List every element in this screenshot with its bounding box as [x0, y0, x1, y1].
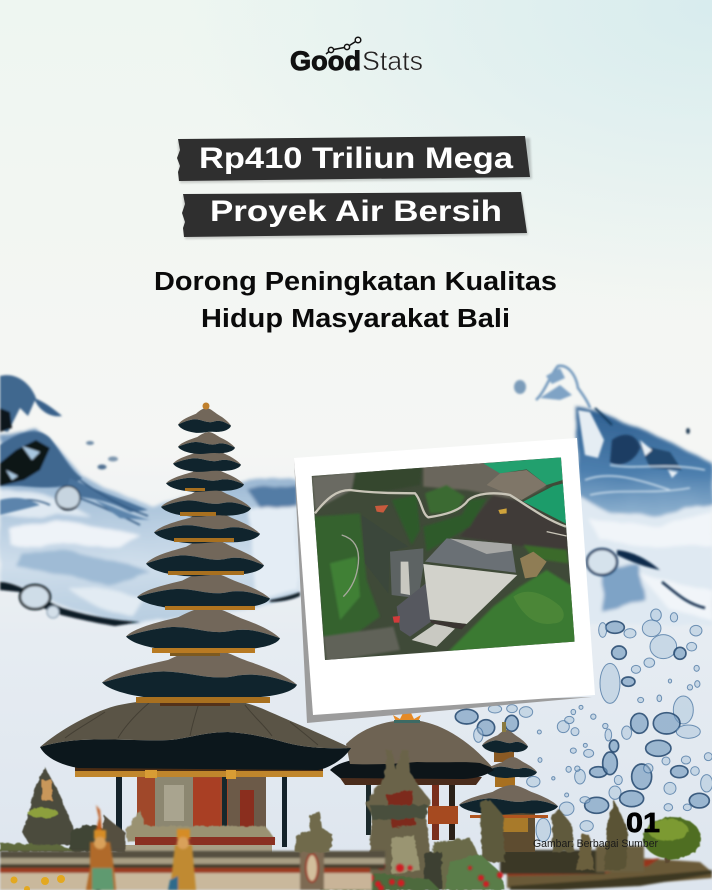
left water splash: [0, 375, 300, 626]
title tape: line 2: Proyek Air Bersih: [210, 195, 502, 228]
statue: left dancer: [86, 805, 116, 890]
subtitle: [154, 268, 557, 333]
GoodStats logo: Stats: [362, 46, 423, 76]
right water splash: [514, 366, 712, 625]
red flowers: [347, 862, 503, 890]
aerial dam photo: [307, 453, 580, 667]
main thatched roof: [40, 698, 351, 770]
logo chart line icon: [326, 37, 361, 54]
stone gate: [366, 750, 490, 890]
title tape: line 1: Rp410 Triliun Mega: [199, 142, 513, 175]
main eave: [75, 766, 323, 779]
subtitle: Hidup Masyarakat Bali: [201, 305, 510, 333]
middle roof supports: [366, 780, 458, 840]
water bubbles: [455, 609, 712, 842]
tree: [643, 817, 701, 863]
left shrine: [0, 767, 125, 852]
pagoda tiers: [102, 402, 297, 706]
frame shadow: [294, 458, 592, 723]
gate medallion: [300, 848, 324, 890]
page number: 01: [626, 807, 660, 838]
middle temple group: [320, 705, 505, 890]
GoodStats logo: Good: [290, 46, 361, 76]
green foliage: [320, 854, 505, 890]
subtitle: Dorong Peningkatan Kualitas: [154, 268, 557, 296]
image source caption: Gambar: Berbagai Sumber: [533, 838, 658, 850]
temple wall: [0, 848, 385, 890]
middle thatched roof: [330, 720, 494, 785]
stone terrace and steps: [500, 846, 712, 890]
main temple: [40, 402, 351, 855]
orange crown: [393, 705, 421, 723]
small pagoda: [459, 722, 558, 852]
yellow flowers: [10, 875, 65, 890]
frame card: [294, 438, 595, 715]
title tape: line 2: [182, 192, 528, 239]
GoodStats logo: [290, 37, 423, 76]
stone towers: [480, 800, 628, 870]
right small temple group: [459, 722, 712, 890]
temple guardian at right of gate: [295, 812, 333, 852]
title tape: line 1: [177, 136, 532, 183]
statue: right dancer: [168, 829, 196, 890]
main temple body: [116, 775, 287, 855]
polaroid photo frame: [294, 438, 595, 723]
